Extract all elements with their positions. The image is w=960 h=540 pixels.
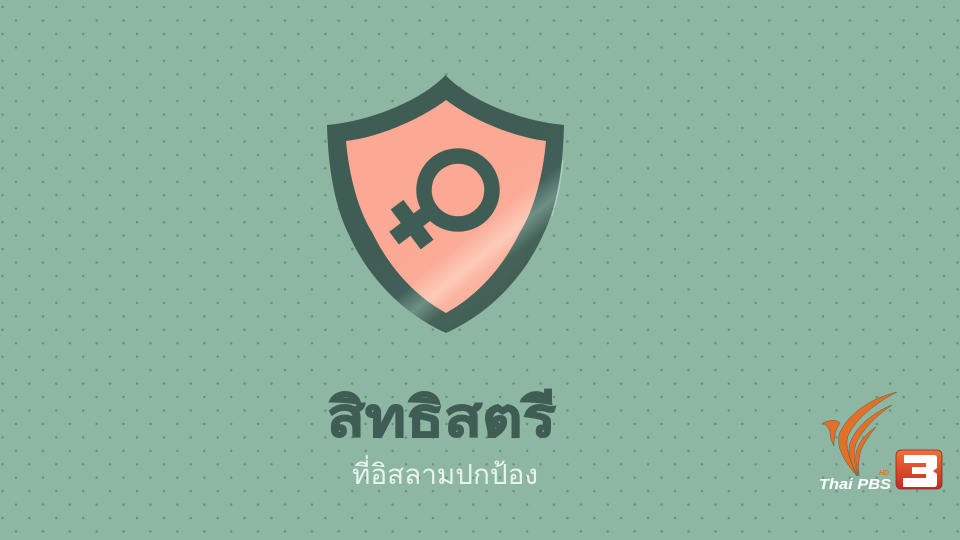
HD mark: HD [879, 470, 889, 477]
icon: channel 3 badge [896, 450, 942, 489]
rim light edge [552, 160, 563, 216]
logo text: Thai PBS [819, 476, 891, 493]
logo: Thai PBS channel 3 HD [819, 392, 942, 493]
icon: shield with female symbol [327, 75, 564, 333]
shield outer rim [327, 75, 564, 333]
icon: orange bird feathers [823, 392, 897, 476]
female symbol [374, 142, 506, 265]
title: สิทธิสตรี [327, 388, 556, 448]
shield pink face [346, 100, 546, 313]
subtitle: ที่อิสลามปกป้อง [352, 455, 538, 490]
